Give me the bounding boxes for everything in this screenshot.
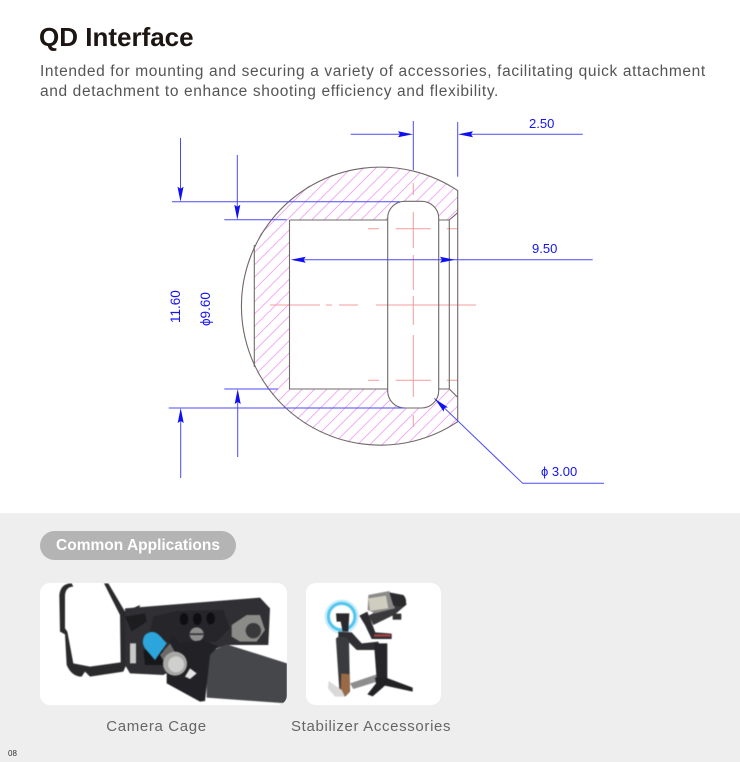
page number: 08	[8, 749, 17, 758]
card: stabilizer accessories	[306, 583, 441, 705]
dimension arrows	[178, 131, 473, 423]
description text: and detachment to enhance shooting efficiency and flexibility.	[40, 83, 499, 100]
label: stabilizer accessories: Stabilizer Accessories	[291, 718, 451, 735]
photo: camera cage with strap	[58, 583, 287, 704]
dimension labels: 2.50	[529, 116, 554, 131]
hatched section	[254, 166, 458, 446]
dimension labels: 9.50	[532, 241, 557, 256]
dimension labels: ϕ9.60	[198, 292, 213, 326]
photo: gimbal stabilizer	[324, 590, 414, 697]
title: QD Interface	[39, 22, 194, 52]
part outline	[241, 167, 458, 445]
panel: common applications	[0, 513, 740, 762]
dimension labels: 11.60	[168, 290, 183, 323]
dimension lines	[169, 121, 604, 483]
heading pill	[40, 531, 236, 560]
dimension labels	[168, 116, 577, 479]
card: camera cage	[40, 583, 287, 705]
heading pill: Common Applications	[56, 537, 220, 554]
description text	[40, 63, 706, 100]
label: camera cage: Camera Cage	[106, 718, 207, 735]
dimension labels: ϕ 3.00	[541, 464, 577, 479]
technical drawing	[168, 116, 604, 484]
center lines	[270, 183, 476, 427]
description text: Intended for mounting and securing a variety of accessories, facilitating quick attachment	[40, 63, 706, 80]
